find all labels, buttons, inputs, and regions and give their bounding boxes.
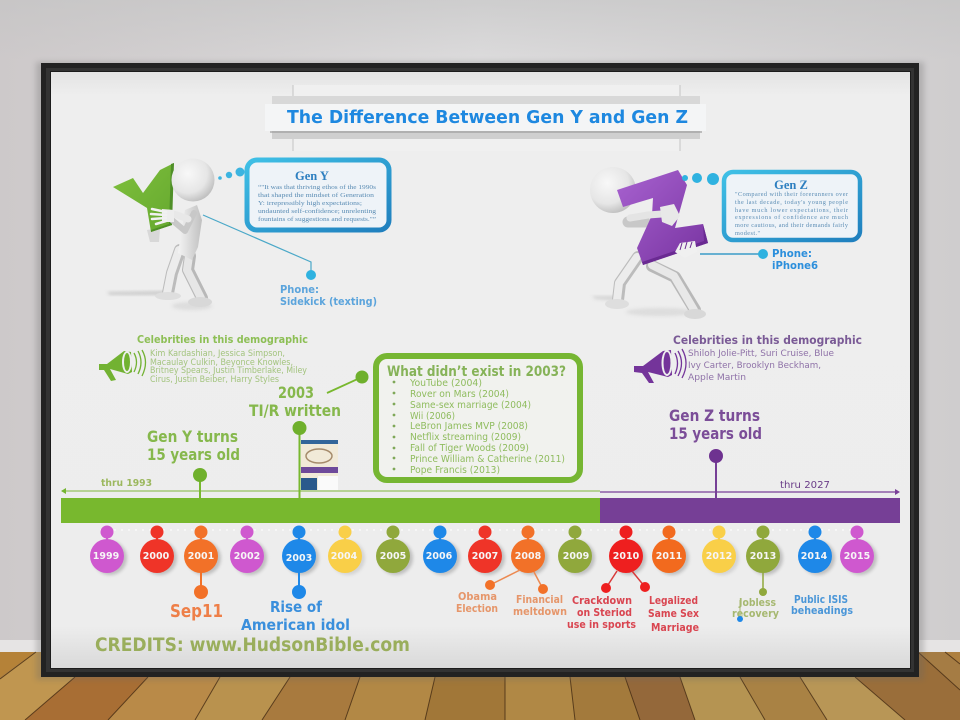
box list xyxy=(409,378,565,476)
year 2007 xyxy=(468,526,505,575)
figure: Gen Y holding letter Y xyxy=(107,158,214,310)
year 2001 xyxy=(184,526,221,575)
callout: Gen Z phone xyxy=(700,247,818,272)
bubble quote Gen Y xyxy=(258,184,377,223)
credits: CREDITS: www.HudsonBible.com xyxy=(95,635,410,656)
event: Legalized Same Sex Marriage: Legalized xyxy=(649,595,698,607)
thought dots Gen Y xyxy=(218,168,244,180)
box list: Netflix streaming (2009) xyxy=(410,432,521,443)
celebrities Gen Z: Shiloh Jolie-Pitt, Suri Cruise, Blue xyxy=(688,349,834,359)
callout: Gen Z phone: iPhone6 xyxy=(772,259,818,272)
box list: Same-sex marriage (2004) xyxy=(410,400,531,411)
event: Sep11: Sep11 xyxy=(170,601,223,622)
marker: Gen Y turns 15: Gen Y turns xyxy=(147,427,238,446)
icon: megaphone Gen Z xyxy=(634,349,686,383)
celebrities Gen Y: Kim Kardashian, Jessica Simpson, xyxy=(150,349,285,359)
year 2010: 2010 xyxy=(613,551,640,562)
bubble quote Gen Z: "Compared with their forerunners over xyxy=(735,191,848,198)
figure: Gen Z holding letter Z xyxy=(590,167,708,319)
icon: megaphone Gen Y xyxy=(99,350,146,381)
celebrities Gen Y xyxy=(137,333,308,385)
year 2009 xyxy=(558,526,595,575)
floor planks xyxy=(0,652,960,720)
box: what didn't exist in 2003 xyxy=(376,356,580,480)
year 2003: 2003 xyxy=(286,553,312,564)
year 2001: 2001 xyxy=(188,551,214,562)
marker: Gen Y turns 15: 15 years old xyxy=(147,445,240,464)
event: Crackdown on Steroid xyxy=(567,571,636,631)
bubble heading Gen Y: Gen Y xyxy=(295,169,329,183)
thumbnail: TI/R document xyxy=(301,440,338,490)
event: Obama Election: Obama xyxy=(458,591,497,603)
celebrities Gen Z: Ivy Carter, Brooklyn Beckham, xyxy=(688,361,821,371)
bubble quote Gen Z: expressions of confidence are much xyxy=(735,214,849,221)
celebrities Gen Y: Celebrities in this demographic xyxy=(137,333,308,346)
bubble quote Gen Z: modest." xyxy=(735,230,760,237)
bubble quote Gen Z: the last decade, today's young people xyxy=(735,199,848,206)
year 2014: 2014 xyxy=(801,551,828,562)
speech bubble Gen Y xyxy=(247,160,389,230)
year 2013: 2013 xyxy=(750,551,776,562)
marker: Gen Y turns 15 xyxy=(147,427,240,498)
year 2013 xyxy=(746,526,783,575)
timeline bars xyxy=(61,488,900,523)
box list: LeBron James MVP (2008) xyxy=(410,421,528,432)
year 2005 xyxy=(376,526,413,575)
year 2008 xyxy=(511,526,548,575)
year 2004 xyxy=(328,526,365,575)
callout: Gen Y phone xyxy=(203,215,377,308)
bubble heading Gen Z: Gen Z xyxy=(774,178,808,192)
event: Public ISIS beheadings: beheadings xyxy=(791,605,853,617)
callout: Gen Y phone: Phone: xyxy=(280,284,319,296)
event: Jobless recovery xyxy=(732,572,779,622)
event: Public ISIS beheadings xyxy=(791,594,853,617)
box list: YouTube (2004) xyxy=(409,378,482,389)
marker: Gen Z turns 15: 15 years old xyxy=(669,424,762,443)
marker: Gen Z turns 15 xyxy=(669,406,762,498)
year 1999 xyxy=(90,526,127,575)
event: Obama Election: Election xyxy=(456,603,498,615)
event: Sep11 xyxy=(170,572,223,622)
title banner xyxy=(265,85,706,151)
dotted track xyxy=(100,529,860,531)
bubble quote Gen Z: have much lower expectations, their xyxy=(735,207,848,214)
year 2012: 2012 xyxy=(706,551,732,562)
bubble quote Gen Z xyxy=(735,191,849,237)
year 2006: 2006 xyxy=(426,551,453,562)
year 2008: 2008 xyxy=(515,551,542,562)
year 2015: 2015 xyxy=(844,551,870,562)
marker: Gen Z turns 15: Gen Z turns xyxy=(669,406,760,425)
bubble quote Gen Z: more cautious, and their demands fairly xyxy=(735,222,849,229)
year 2011: 2011 xyxy=(656,551,682,562)
event: Rise of American idol xyxy=(241,572,350,634)
event: Crackdown on Steroid: Crackdown xyxy=(572,595,632,607)
bubble quote Gen Y: “"It was that thriving ethos of the 1990s xyxy=(258,184,377,191)
year 2006 xyxy=(423,526,460,575)
celebrities Gen Z: Celebrities in this demographic xyxy=(673,333,862,347)
event: Public ISIS beheadings: Public ISIS xyxy=(794,594,848,606)
callout: Gen Z phone: Phone: xyxy=(772,247,812,260)
bubble quote Gen Y: undaunted self-confidence; unrelenting xyxy=(258,208,376,215)
label thru 2027: thru 2027 xyxy=(780,480,830,491)
celebrities Gen Y: Britney Spears, Justin Timberlake, Miley xyxy=(150,366,307,376)
box heading: What didn’t exist in 2003? xyxy=(387,364,566,380)
event: Rise of American idol: American idol xyxy=(241,616,350,634)
year 2010 xyxy=(609,526,646,575)
year 2000: 2000 xyxy=(143,551,170,562)
year 2007: 2007 xyxy=(472,551,498,562)
year 2015 xyxy=(840,526,877,575)
year 2012 xyxy=(702,526,739,575)
picture frame xyxy=(36,62,924,680)
celebrities Gen Z: Apple Martin xyxy=(688,373,746,383)
thought dots Gen Z xyxy=(682,173,719,185)
event: Legalized Same Sex Marriage xyxy=(632,571,699,634)
year 2003 xyxy=(282,526,319,575)
label thru 1993: thru 1993 xyxy=(101,478,152,489)
year 2000 xyxy=(140,526,177,575)
year nodes xyxy=(90,526,877,575)
celebrities Gen Y: Cirus, Justin Beiber, Harry Styles xyxy=(150,375,280,385)
event: Obama Election xyxy=(456,570,520,615)
speech bubble Gen Z xyxy=(724,172,860,240)
event: Financial meltdown xyxy=(513,572,567,618)
celebrities Gen Y: Macaulay Culkin, Beyonce Knowles, xyxy=(150,358,293,368)
year 2004: 2004 xyxy=(331,551,358,562)
box list: Pope Francis (2013) xyxy=(410,465,500,476)
year 2002 xyxy=(230,526,267,575)
event: Jobless recovery: Jobless xyxy=(738,597,776,609)
celebrities Gen Z xyxy=(673,333,862,383)
marker: 2003 TI/R written xyxy=(249,370,368,498)
box list: Prince William & Catherine (2011) xyxy=(410,454,565,465)
year 2002: 2002 xyxy=(234,551,260,562)
event: Legalized Same Sex Marriage: Same Sex xyxy=(648,608,699,620)
callout: Gen Y phone: Sidekick (texting) xyxy=(280,296,377,308)
box list: Rover on Mars (2004) xyxy=(410,389,509,400)
year 2014 xyxy=(798,526,835,575)
bubble quote Gen Y: Y: irrepressibly high expectations; xyxy=(258,200,362,207)
event: Legalized Same Sex Marriage: Marriage xyxy=(651,622,699,634)
event: Rise of American idol: Rise of xyxy=(270,598,322,616)
event: Financial meltdown: meltdown xyxy=(513,606,567,618)
box list: Wii (2006) xyxy=(410,411,455,422)
event: Crackdown on Steroid: use in sports xyxy=(567,619,636,631)
year 2011 xyxy=(652,526,689,575)
box list: Fall of Tiger Woods (2009) xyxy=(410,443,529,454)
year 1999: 1999 xyxy=(93,551,119,562)
marker: 2003 TI/R written: TI/R written xyxy=(249,401,341,420)
event: Jobless recovery: recovery xyxy=(732,608,779,620)
event: Crackdown on Steroid: on Steriod xyxy=(577,607,632,619)
title: The Difference Between Gen Y and Gen Z xyxy=(287,108,688,128)
bubble quote Gen Y: that shaped the mindset of Generation xyxy=(258,192,374,199)
year 2005: 2005 xyxy=(380,551,406,562)
year 2009: 2009 xyxy=(563,551,589,562)
event: Financial meltdown: Financial xyxy=(516,594,563,606)
bubble quote Gen Y: fountains of suggestions and requests."” xyxy=(258,216,376,223)
marker: 2003 TI/R written: 2003 xyxy=(278,383,314,402)
